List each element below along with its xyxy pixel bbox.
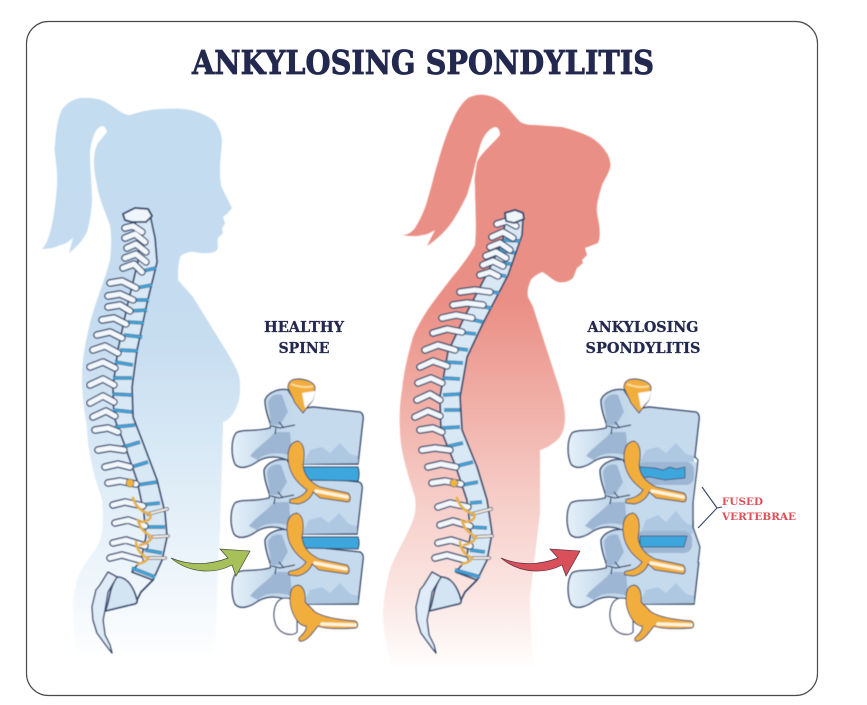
top vertebra [505, 210, 524, 223]
disc 2 [640, 536, 687, 547]
lower spine [92, 479, 168, 653]
disc 2 [302, 537, 359, 549]
heading: healthy spine: SPINE [278, 339, 330, 357]
shade 2 [636, 531, 692, 553]
fused bump shading [640, 511, 693, 534]
bracket [698, 487, 722, 528]
processes fill [415, 221, 516, 560]
processes outline [90, 226, 146, 560]
heading: ankylosing spondylitis: ANKYLOSING [587, 318, 698, 336]
disc 1 [303, 467, 359, 481]
disc 1 wavy [640, 467, 685, 480]
lower spine [416, 479, 492, 653]
nerve set [287, 441, 358, 641]
fused right edge [693, 457, 700, 563]
title: ANKYLOSING SPONDYLITIS [191, 43, 654, 82]
discs outline [442, 240, 520, 577]
processes outline [415, 221, 516, 560]
arrow: green [171, 549, 250, 576]
label: fused vertebrae: VERTEBRAE [721, 511, 796, 523]
discs outline [113, 268, 165, 577]
discs [113, 268, 165, 577]
panel: healthy silhouette [42, 98, 240, 658]
heading: healthy spine: HEALTHY [264, 318, 344, 336]
discs [442, 240, 520, 577]
vertebrae: fused detail [567, 379, 704, 641]
spine column [113, 215, 167, 580]
top vertebra [123, 208, 152, 222]
label: fused vertebrae: FUSED [722, 496, 763, 508]
vertebrae: healthy detail [231, 379, 363, 641]
heading: ankylosing spondylitis: SPONDYLITIS [586, 339, 700, 357]
spine: healthy [90, 208, 168, 653]
mask beyond fused edge [694, 458, 704, 562]
arrow: red [501, 549, 580, 576]
shade 1 [636, 462, 694, 485]
spine column [440, 217, 523, 580]
nerve set [623, 441, 694, 641]
fused bridge [636, 462, 700, 563]
vertebra set [567, 379, 699, 634]
processes fill [90, 226, 146, 560]
panel: affected silhouette [383, 95, 610, 668]
vertebra set [231, 379, 363, 634]
spine: affected [415, 210, 524, 653]
